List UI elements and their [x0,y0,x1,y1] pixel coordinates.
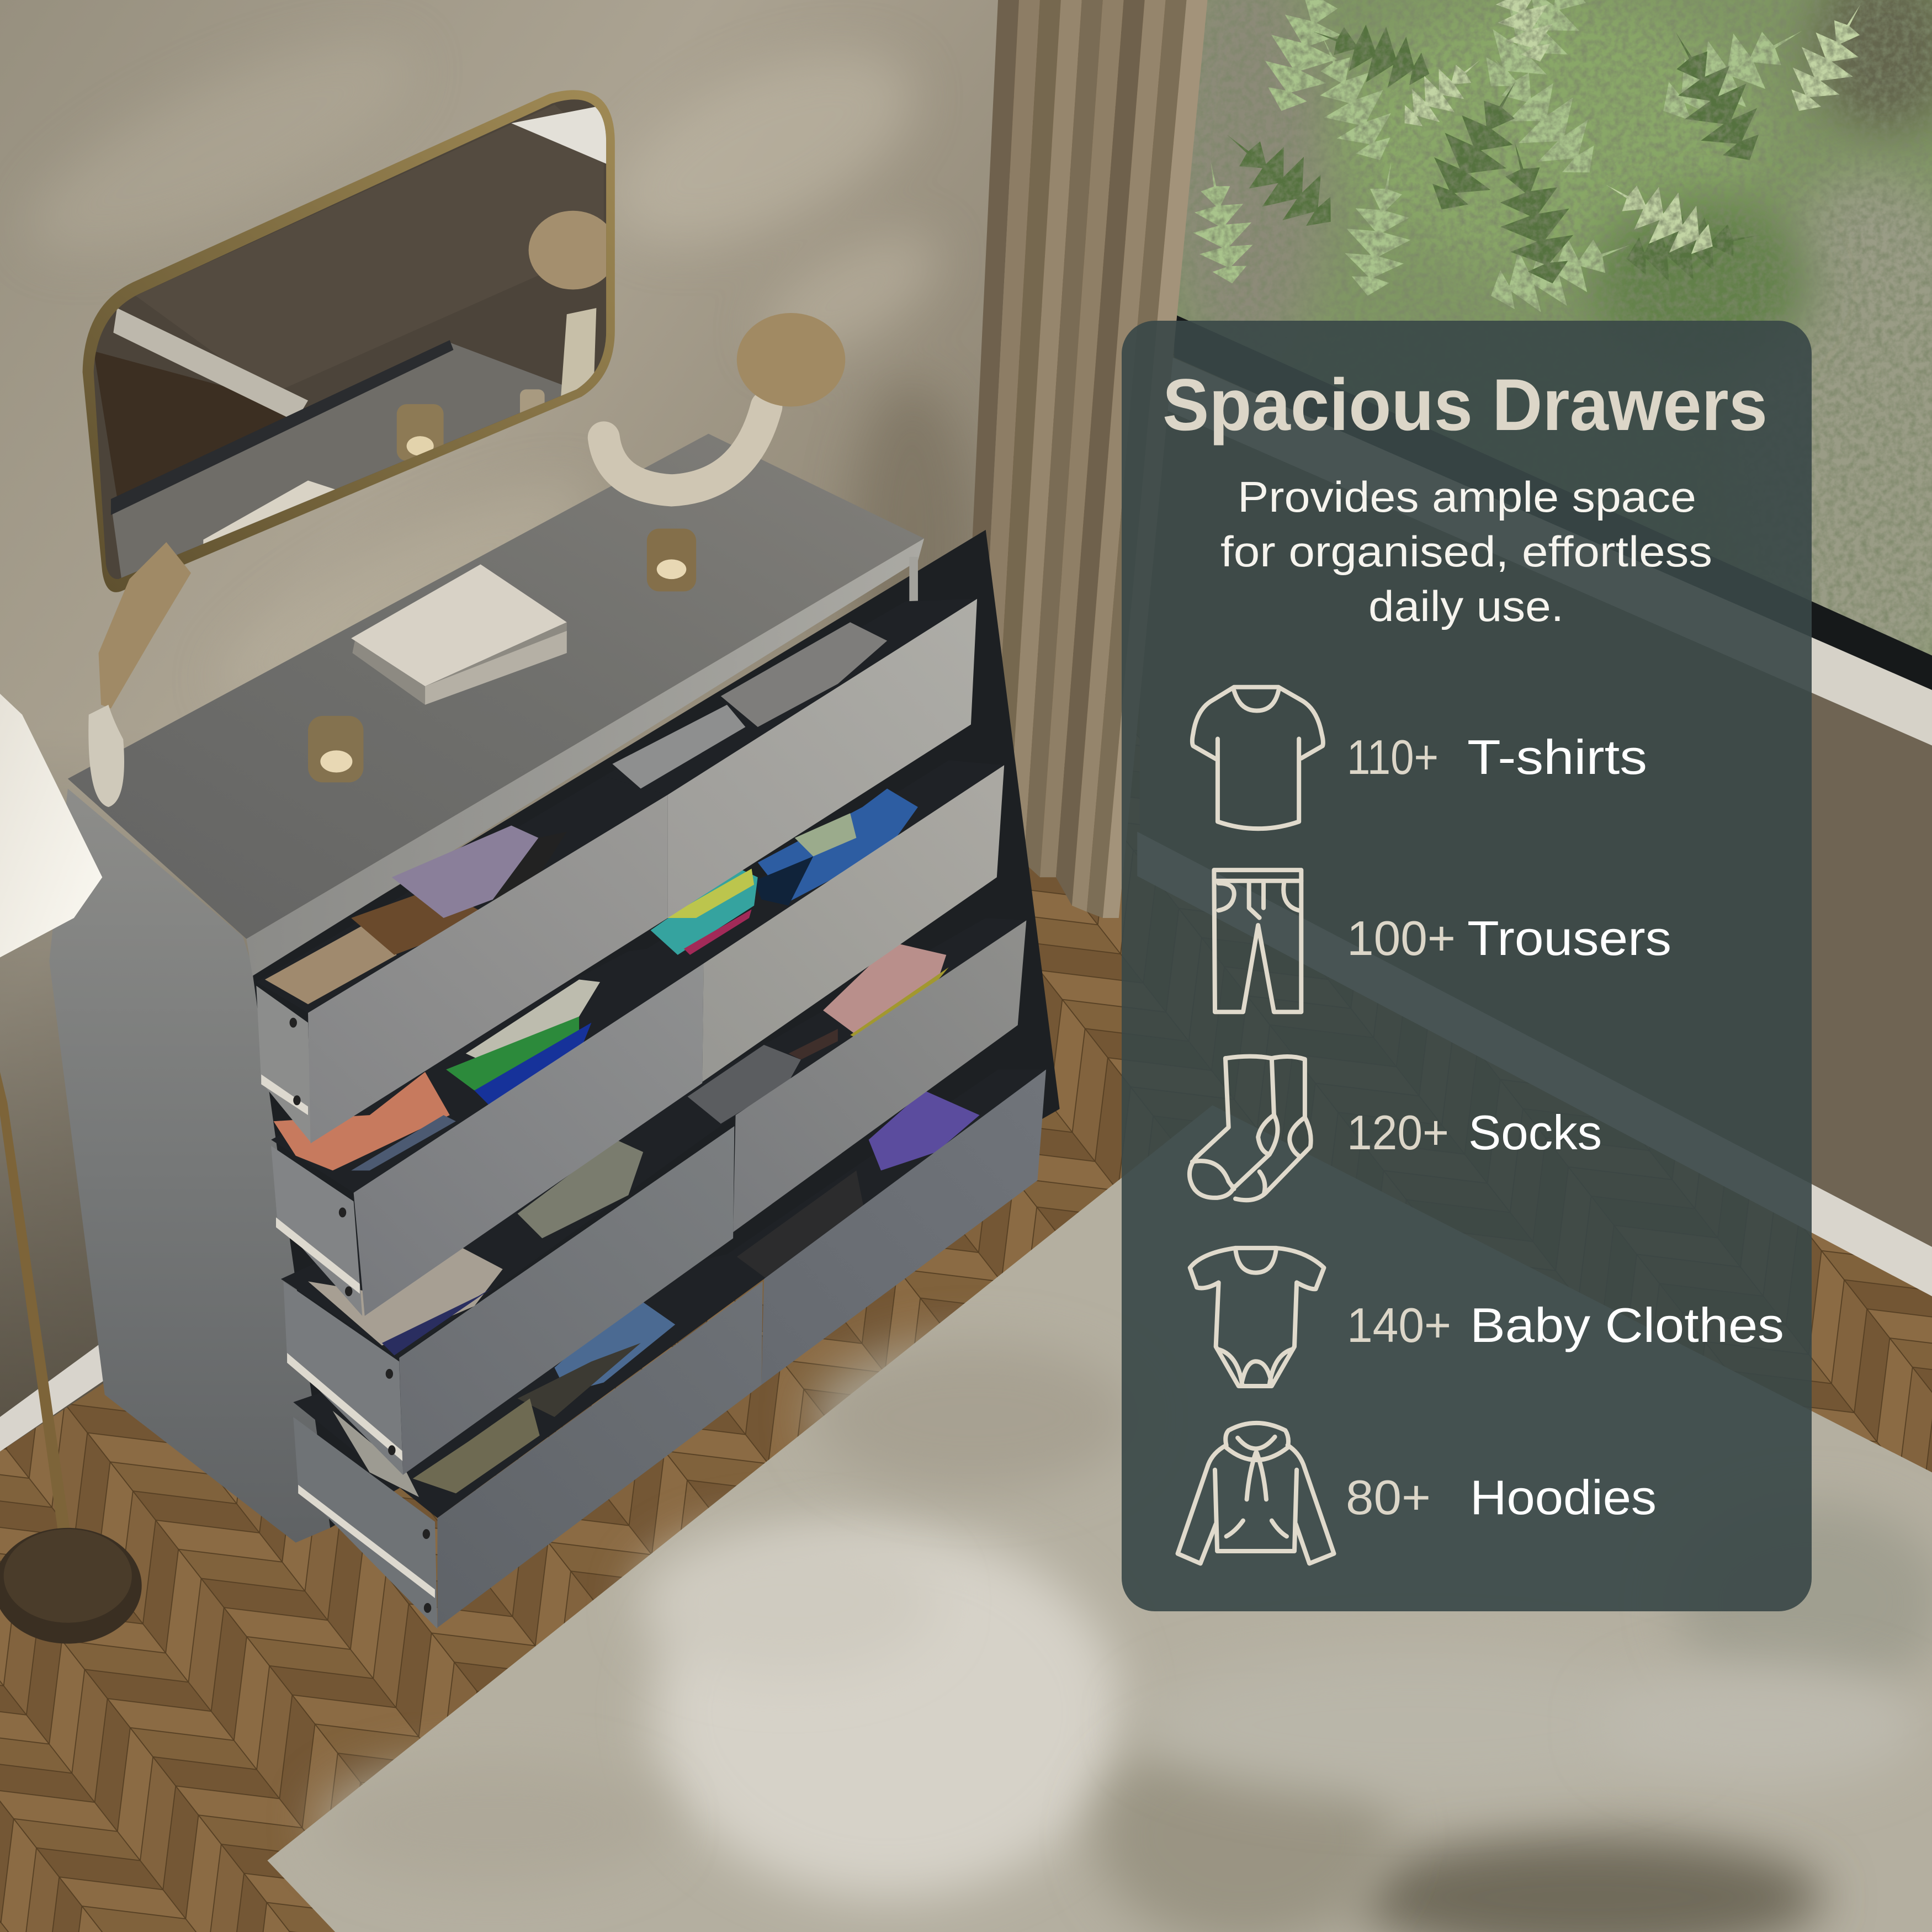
rug [267,1105,1932,1932]
window frame [1174,314,1932,692]
drawer 4 left front [437,1281,763,1628]
mirror [74,74,628,604]
count: 80+: 80+ [1346,1470,1431,1525]
arch vase [604,407,766,490]
right skirting board [1137,832,1932,1296]
item: t-shirts [1192,687,1647,829]
drawer 1 side panel [256,986,312,1143]
title: Spacious Drawers [1163,364,1768,446]
lamp pole [0,1072,71,1540]
drawer 3 right front [733,920,1026,1232]
label: baby clothes: Baby Clothes [1470,1298,1784,1352]
icon: socks [1190,1057,1311,1200]
drawer 4 side panel [293,1417,437,1629]
icon: baby bodysuit [1190,1248,1324,1386]
description [1220,473,1712,630]
decor on dresser top [88,313,845,807]
top front band [246,538,924,976]
wall light patches [6,3,973,733]
count: 100+: 100+ [1347,911,1456,965]
drawer 2 left front [354,964,704,1316]
item: baby clothes [1190,1248,1784,1386]
pampas and ribbed vase [88,542,191,807]
drawer 2 right front [702,765,1004,1082]
floor lamp [0,694,142,1644]
icon: trousers [1214,870,1301,1012]
drawer row 3 [281,918,1026,1475]
window view: foliage [1158,0,1932,690]
carcass side panel [49,789,330,1543]
info panel [1122,321,1812,1611]
count: 110+: 110+ [1347,730,1439,784]
dresser [49,434,1060,1629]
drawer 3 side panel [283,1281,403,1475]
curtain [961,0,1207,918]
books [351,564,567,705]
drawer row 4 [293,1069,1046,1629]
drawer 3 left front [399,1126,734,1475]
right wall below window [1140,370,1932,1269]
label: t-shirts: T-shirts [1467,730,1647,784]
label: trousers: Trousers [1467,911,1671,965]
label: hoodies: Hoodies [1470,1470,1657,1525]
dried flower [737,313,845,407]
description: Provides ample space [1238,473,1696,521]
drawer 2 side panel [271,1146,362,1316]
count: 140+: 140+ [1347,1298,1451,1352]
drawer 4 right front [761,1069,1046,1385]
drawer 1 right front [668,599,977,918]
drawer row 1 [256,599,977,1143]
label: socks: Socks [1468,1105,1602,1160]
lamp base [0,1528,142,1644]
description: for organised, effortless [1220,527,1712,576]
icon: hoodie [1178,1423,1334,1563]
window sill [1158,351,1932,745]
dresser top surface [68,434,924,939]
drawer row 2 [271,760,1004,1316]
count: 120+: 120+ [1347,1105,1449,1160]
main plaster wall [0,0,1013,1451]
item: socks [1190,1057,1602,1200]
candle front [308,716,363,782]
description: daily use. [1368,582,1564,630]
item: trousers [1214,870,1671,1012]
candle back [647,529,696,591]
item: hoodies [1178,1423,1657,1563]
left skirting board [0,1343,105,1451]
icon: t-shirt [1192,687,1323,829]
drawer 1 left front [308,795,668,1143]
lamp shade [0,694,102,957]
rug marbling [320,1343,1932,1932]
